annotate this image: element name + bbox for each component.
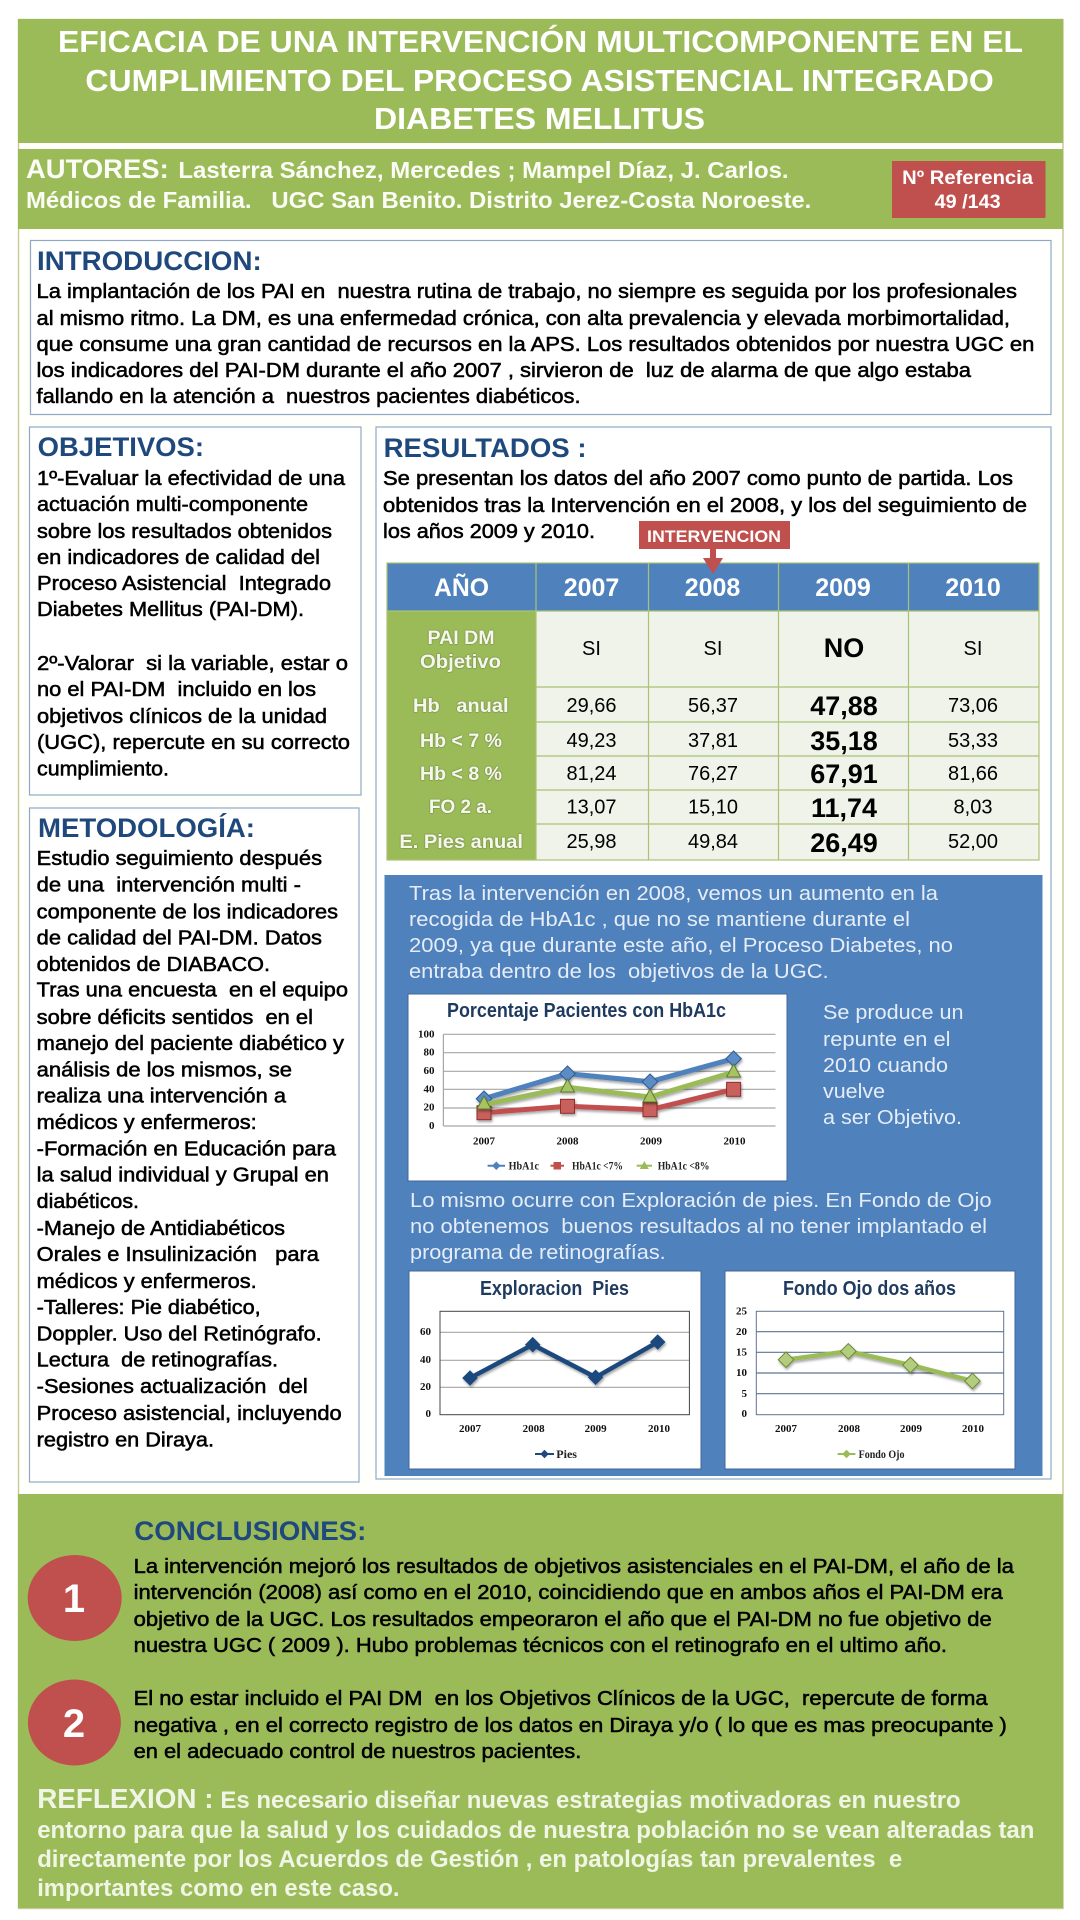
chart legend	[488, 1158, 710, 1172]
intro text	[36, 280, 1034, 408]
title: CUMPLIMIENTO DEL PROCESO ASISTENCIAL INTEGRADO	[85, 63, 994, 98]
table row labels: Hb anual	[413, 696, 509, 717]
chart legend: HbA1c <8%	[658, 1158, 710, 1172]
table row labels: Hb < 8 %	[420, 764, 502, 785]
y axis labels: 60	[424, 1065, 435, 1077]
table row labels: E. Pies anual	[399, 832, 523, 853]
x axis labels: 2009	[640, 1136, 662, 1148]
table header: 2008	[685, 574, 740, 602]
chart legend: HbA1c <7%	[572, 1158, 623, 1172]
objetivos text: Proceso Asistencial Integrado	[37, 572, 331, 595]
table values 2007: 25,98	[566, 831, 617, 853]
metodologia text: diabéticos.	[37, 1190, 139, 1213]
analysis text 2	[410, 1189, 992, 1264]
table values 2010: 73,06	[948, 695, 998, 717]
analysis side text: a ser Objetivo.	[823, 1106, 962, 1129]
table values 2009: 26,49	[810, 828, 878, 858]
conclusion 2 text: negativa , en el correcto registro de los datos en Diraya y/o ( lo que es mas preocupante )	[134, 1714, 1007, 1737]
table values 2008: SI	[704, 638, 722, 660]
heading: introduccion: INTRODUCCION:	[37, 246, 262, 276]
chart title: Porcentaje Pacientes con HbA1c	[447, 1000, 726, 1022]
panel: blue analysis	[384, 875, 1042, 1476]
intro text: al mismo ritmo. La DM, es una enfermedad crónica, con alta prevalencia y elevada morbimortalidad,	[36, 307, 1010, 330]
table values 2009: 35,18	[810, 726, 878, 756]
table values 2008: 49,84	[688, 831, 738, 853]
badge: 1: 1	[63, 1577, 85, 1621]
table values 2010: SI	[964, 638, 982, 660]
panel: introduccion	[30, 240, 1051, 414]
metodologia text: -Talleres: Pie diabético,	[37, 1296, 261, 1319]
y axis labels: 60	[420, 1326, 432, 1338]
table values 2010: 52,00	[948, 831, 998, 853]
objetivos text: en indicadores de calidad del	[37, 546, 320, 569]
x axis labels: 2008	[556, 1136, 579, 1148]
metodologia text	[37, 847, 348, 1452]
objetivos text: no el PAI-DM incluido en los	[37, 678, 316, 701]
analysis text 1: 2009, ya que durante este año, el Proceso Diabetes, no	[409, 934, 953, 957]
table values 2010	[948, 638, 998, 853]
objetivos text: 2º-Valorar si la variable, estar o	[37, 652, 348, 675]
table values 2007: SI	[582, 638, 601, 660]
objetivos text: Diabetes Mellitus (PAI-DM).	[37, 598, 304, 621]
x axis labels: 2010	[962, 1423, 984, 1435]
y axis labels: 5	[742, 1388, 748, 1400]
reflexion: REFLEXION :	[37, 1783, 214, 1814]
table header: 2007	[564, 574, 619, 602]
intro text: que consume una gran cantidad de recursos en la APS. Los resultados obtenidos por nuestra UGC en	[36, 333, 1034, 356]
y axis labels: 10	[736, 1367, 748, 1379]
table row labels	[399, 628, 523, 853]
objetivos text: 1º-Evaluar la efectividad de una	[37, 467, 346, 490]
metodologia text: Estudio seguimiento después	[37, 847, 322, 870]
x axis labels: 2008	[523, 1423, 545, 1435]
y axis labels	[418, 1029, 435, 1132]
conclusion 1 text: objetivo de la UGC. Los resultados empeoraron el año que el PAI-DM no fue objetivo de	[134, 1608, 992, 1631]
callout: intervencion	[639, 521, 790, 549]
series: HbA1c under 7	[477, 1082, 741, 1120]
reflexion: importantes como en este caso.	[37, 1875, 399, 1902]
conclusion 1 text	[134, 1555, 1014, 1657]
y axis labels: 0	[742, 1408, 748, 1420]
resultados text	[383, 467, 1027, 543]
table values 2009	[810, 633, 878, 858]
metodologia text: Orales e Insulinización para	[37, 1243, 320, 1266]
intro text: La implantación de los PAI en nuestra rutina de trabajo, no siempre es seguida por los profesionales	[36, 280, 1017, 303]
y axis labels: 40	[424, 1084, 435, 1096]
intro text: los indicadores del PAI-DM durante el año 2007 , sirvieron de luz de alarma de que algo estaba	[36, 359, 972, 382]
heading: objetivos: OBJETIVOS:	[38, 432, 204, 462]
metodologia text: realiza una intervención a	[37, 1085, 287, 1108]
chart legend: Fondo Ojo	[859, 1447, 904, 1461]
objetivos text: (UGC), repercute en su correcto	[37, 731, 350, 754]
table values 2008: 37,81	[688, 730, 738, 752]
authors text: Lasterra Sánchez, Mercedes ; Mampel Díaz, J. Carlos.	[178, 157, 789, 183]
badge: 2: 2	[63, 1702, 85, 1746]
authors band	[18, 149, 1063, 229]
objetivos text: cumplimiento.	[37, 758, 169, 780]
heading: conclusiones: CONCLUSIONES:	[134, 1516, 366, 1546]
analysis text 1: entraba dentro de los objetivos de la UGC.	[409, 960, 829, 983]
analysis text 2: Lo mismo ocurre con Exploración de pies. En Fondo de Ojo	[410, 1189, 992, 1212]
analysis text 2: no obtenemos buenos resultados al no tener implantado el	[410, 1215, 987, 1238]
reflexion: entorno para que la salud y los cuidados de nuestra población no se vean alteradas tan	[37, 1817, 1034, 1844]
series: HbA1c under 8	[477, 1064, 741, 1109]
metodologia text: registro en Diraya.	[37, 1429, 214, 1452]
metodologia text: Doppler. Uso del Retinógrafo.	[37, 1323, 322, 1346]
y axis labels: 20	[736, 1326, 748, 1338]
objetivos text: sobre los resultados obtenidos	[37, 520, 332, 543]
series: HbA1c	[476, 1051, 741, 1106]
y axis labels: 15	[736, 1347, 748, 1359]
resultados text: Se presentan los datos del año 2007 como punto de partida. Los	[383, 467, 1013, 490]
y axis labels: 80	[424, 1047, 435, 1059]
analysis side text: repunte en el	[823, 1028, 950, 1051]
y axis labels: 25	[736, 1306, 748, 1318]
metodologia text: -Sesiones actualización del	[37, 1375, 308, 1398]
metodologia text: manejo del paciente diabético y	[37, 1032, 345, 1055]
x axis labels: 2007	[775, 1423, 798, 1435]
metodologia text: análisis de los mismos, se	[37, 1059, 292, 1082]
metodologia text: de una intervención multi -	[37, 874, 301, 897]
table row labels: FO 2 a.	[429, 797, 492, 818]
table row labels: Objetivo	[420, 652, 501, 673]
table values 2008: 56,37	[688, 695, 738, 717]
table header: AÑO	[434, 572, 489, 602]
metodologia text: de calidad del PAI-DM. Datos	[37, 927, 322, 950]
y axis labels	[420, 1326, 432, 1420]
y axis labels: 0	[426, 1408, 432, 1420]
panel: objetivos	[30, 427, 361, 795]
series: fondo ojo	[778, 1344, 980, 1389]
analysis text 1: recogida de HbA1c , que no se mantiene durante el	[409, 908, 910, 931]
table values 2010: 53,33	[948, 730, 998, 752]
analysis side text	[823, 1001, 964, 1129]
y axis labels: 100	[418, 1029, 435, 1041]
x axis labels	[775, 1423, 984, 1435]
series: pies	[462, 1334, 665, 1386]
conclusion 2 text: en el adecuado control de nuestros pacientes.	[134, 1740, 581, 1763]
metodologia text: Lectura de retinografías.	[37, 1349, 278, 1372]
chart title: Exploracion Pies	[480, 1278, 629, 1300]
analysis side text: 2010 cuando	[823, 1054, 948, 1077]
y axis labels: 40	[420, 1354, 432, 1366]
reference badge	[892, 161, 1046, 218]
authors text: AUTORES:	[26, 154, 169, 184]
intro text: fallando en la atención a nuestros pacientes diabéticos.	[36, 385, 581, 408]
conclusion 1 text: La intervención mejoró los resultados de objetivos asistenciales en el PAI-DM, el año de la	[134, 1555, 1014, 1578]
conclusion 1 text: intervención (2008) así como en el 2010, coincidiendo que en ambos años el PAI-DM era	[134, 1581, 1003, 1604]
results table	[387, 563, 1039, 860]
table values 2007	[566, 638, 617, 853]
table row labels: PAI DM	[428, 628, 494, 649]
x axis labels	[473, 1136, 746, 1148]
chart: exploracion pies	[409, 1271, 701, 1469]
authors text	[26, 154, 811, 213]
metodologia text: -Formación en Educación para	[37, 1138, 337, 1161]
table header: 2009	[815, 574, 871, 602]
chart: porcentaje pacientes con HbA1c	[408, 994, 787, 1181]
table values 2009: 67,91	[810, 759, 878, 789]
table values 2009: NO	[824, 633, 864, 663]
resultados text: los años 2009 y 2010.	[383, 520, 595, 543]
table values 2008	[688, 638, 738, 853]
heading: resultados: RESULTADOS :	[384, 433, 587, 463]
table values 2008: 76,27	[688, 763, 738, 785]
table values 2009: 47,88	[810, 691, 878, 721]
table values 2009: 11,74	[811, 793, 877, 823]
reference badge: Nº Referencia	[902, 168, 1033, 189]
x axis labels: 2007	[459, 1423, 482, 1435]
chart legend	[535, 1447, 577, 1461]
chart legend: Pies	[556, 1447, 577, 1461]
title	[58, 23, 1023, 136]
y axis labels: 0	[429, 1120, 435, 1132]
x axis labels: 2009	[900, 1423, 922, 1435]
metodologia text: obtenidos de DIABACO.	[37, 953, 270, 976]
metodologia text: sobre déficits sentidos en el	[37, 1006, 313, 1029]
resultados text: obtenidos tras la Intervención en el 2008, y los del seguimiento de	[383, 494, 1027, 517]
title band	[18, 19, 1063, 143]
x axis labels: 2007	[473, 1136, 496, 1148]
table values 2010: 8,03	[954, 797, 992, 819]
metodologia text: componente de los indicadores	[37, 901, 338, 924]
panel: resultados	[376, 427, 1051, 1479]
objetivos text: objetivos clínicos de la unidad	[37, 705, 327, 728]
arrow: intervencion to 2008	[703, 549, 723, 574]
reflexion: directamente por los Acuerdos de Gestión , en patologías tan prevalentes e	[37, 1846, 902, 1873]
analysis side text: vuelve	[823, 1080, 885, 1103]
panel: conclusiones	[18, 1494, 1063, 1908]
analysis side text: Se produce un	[823, 1001, 964, 1024]
metodologia text: médicos y enfermeros.	[37, 1270, 257, 1293]
objetivos text: actuación multi-componente	[37, 493, 308, 516]
chart legend	[838, 1447, 904, 1461]
heading: metodologia: METODOLOGÍA:	[38, 812, 255, 843]
chart: fondo ojo dos años	[725, 1271, 1015, 1469]
conclusion 2 text: El no estar incluido el PAI DM en los Objetivos Clínicos de la UGC, repercute de forma	[134, 1687, 988, 1710]
table values 2007: 49,23	[566, 730, 617, 752]
table values 2007: 13,07	[566, 797, 617, 819]
badge: 1	[28, 1555, 122, 1641]
metodologia text: la salud individual y Grupal en	[37, 1164, 329, 1187]
x axis labels: 2010	[724, 1136, 746, 1148]
metodologia text: -Manejo de Antidiabéticos	[37, 1217, 285, 1240]
metodologia text: Tras una encuesta en el equipo	[37, 979, 348, 1002]
callout: intervencion: INTERVENCION	[647, 527, 781, 546]
table values 2008: 15,10	[688, 797, 738, 819]
table values 2007: 29,66	[566, 695, 617, 717]
y axis labels: 20	[420, 1381, 432, 1393]
reflexion	[37, 1783, 1034, 1902]
analysis text 1	[409, 882, 953, 983]
table header: 2010	[945, 574, 1001, 602]
chart title: Fondo Ojo dos años	[783, 1278, 956, 1300]
chart legend: HbA1c	[509, 1158, 540, 1172]
conclusion 1 text: nuestra UGC ( 2009 ). Hubo problemas técnicos con el retinografo en el ultimo año.	[134, 1634, 947, 1657]
panel: metodologia	[30, 808, 359, 1482]
badge: 2	[28, 1680, 121, 1766]
y axis labels	[736, 1306, 748, 1420]
reference badge: 49 /143	[935, 192, 1001, 213]
x axis labels: 2008	[838, 1423, 860, 1435]
y axis labels: 20	[424, 1102, 435, 1114]
analysis text 2: programa de retinografías.	[410, 1241, 666, 1264]
table values 2007: 81,24	[566, 763, 617, 785]
table values 2010: 81,66	[948, 763, 998, 785]
table row labels: Hb < 7 %	[420, 731, 502, 752]
x axis labels	[459, 1423, 670, 1435]
metodologia text: médicos y enfermeros:	[37, 1111, 257, 1134]
table header	[434, 572, 1001, 602]
x axis labels: 2010	[648, 1423, 670, 1435]
x axis labels: 2009	[585, 1423, 607, 1435]
authors text: Médicos de Familia. UGC San Benito. Distrito Jerez-Costa Noroeste.	[26, 187, 811, 213]
reflexion: Es necesario diseñar nuevas estrategias motivadoras en nuestro	[220, 1787, 961, 1814]
title: EFICACIA DE UNA INTERVENCIÓN MULTICOMPONENTE EN EL	[58, 23, 1023, 59]
metodologia text: Proceso asistencial, incluyendo	[37, 1402, 342, 1425]
objetivos text	[37, 467, 350, 780]
conclusion 2 text	[134, 1687, 1007, 1763]
analysis text 1: Tras la intervención en 2008, vemos un aumento en la	[409, 882, 939, 905]
title: DIABETES MELLITUS	[374, 101, 705, 136]
